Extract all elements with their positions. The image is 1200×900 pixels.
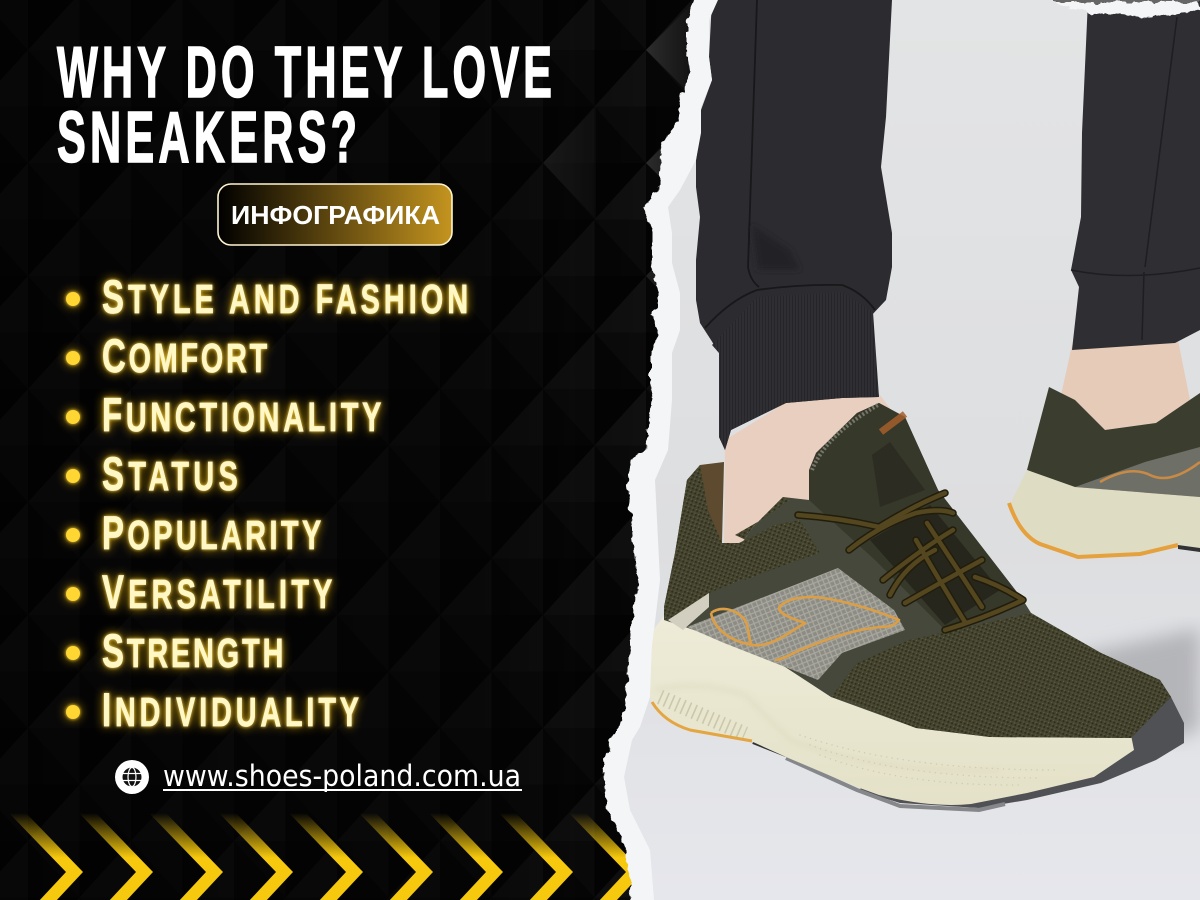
badge: infographic pill (218, 184, 452, 245)
midsole (648, 616, 1134, 805)
photo: sneakers and legs (600, 0, 1200, 900)
item: Strength: STRENGTH (102, 624, 283, 677)
heel lining (700, 462, 724, 543)
right leg ankle (1060, 340, 1190, 432)
item: Individuality: INDIVIDUALITY (102, 683, 359, 736)
torn paper top right (1045, 0, 1200, 18)
left ankle (724, 395, 895, 550)
trouser cuff ribbing (712, 314, 879, 450)
main sneaker (648, 403, 1184, 810)
item: Versatility: VERSATILITY (102, 565, 333, 618)
perforation dots (800, 735, 1055, 785)
midsole shading curve (655, 686, 1000, 771)
title: SNEAKERS? (57, 97, 357, 178)
chevron arrows row (9, 813, 643, 900)
background: dark pyramid pattern (216, 0, 694, 900)
floor shadow (1075, 628, 1200, 740)
photo backdrop (600, 0, 1200, 900)
orange logo outline (711, 597, 899, 660)
upper base silhouette (664, 403, 1171, 738)
orange heel rim (652, 702, 752, 741)
right trouser leg (1071, 0, 1200, 350)
glowing list of reasons (66, 270, 468, 736)
title (57, 32, 552, 178)
item: Functionality: FUNCTIONALITY (102, 388, 382, 441)
toe mesh (831, 613, 1171, 738)
heel groove lines (660, 697, 745, 734)
title: WHY DO THEY LOVE (57, 32, 552, 113)
left trouser leg (696, 0, 892, 450)
brand mark on tongue (881, 414, 905, 432)
tongue (809, 403, 1023, 630)
lace throat dark (870, 505, 1000, 625)
outsole and toe bumper (857, 697, 1184, 808)
gray window panel (687, 568, 905, 680)
icon: globe (115, 760, 149, 794)
item: Status: STATUS (102, 447, 238, 500)
torn white paper edge (602, 0, 760, 900)
item: Style and fashion: STYLE AND FASHION (102, 270, 468, 323)
metallic heel tab (668, 593, 709, 630)
laces (798, 493, 1023, 630)
item: Comfort: COMFORT (102, 329, 268, 382)
background sneaker (1009, 387, 1200, 557)
item: Popularity: POPULARITY (102, 506, 321, 559)
website link: www.shoes-poland.com.ua (163, 759, 521, 793)
badge: infographic pill: ИНФОГРАФИКА (231, 200, 440, 230)
heel mesh quarter (664, 465, 790, 620)
